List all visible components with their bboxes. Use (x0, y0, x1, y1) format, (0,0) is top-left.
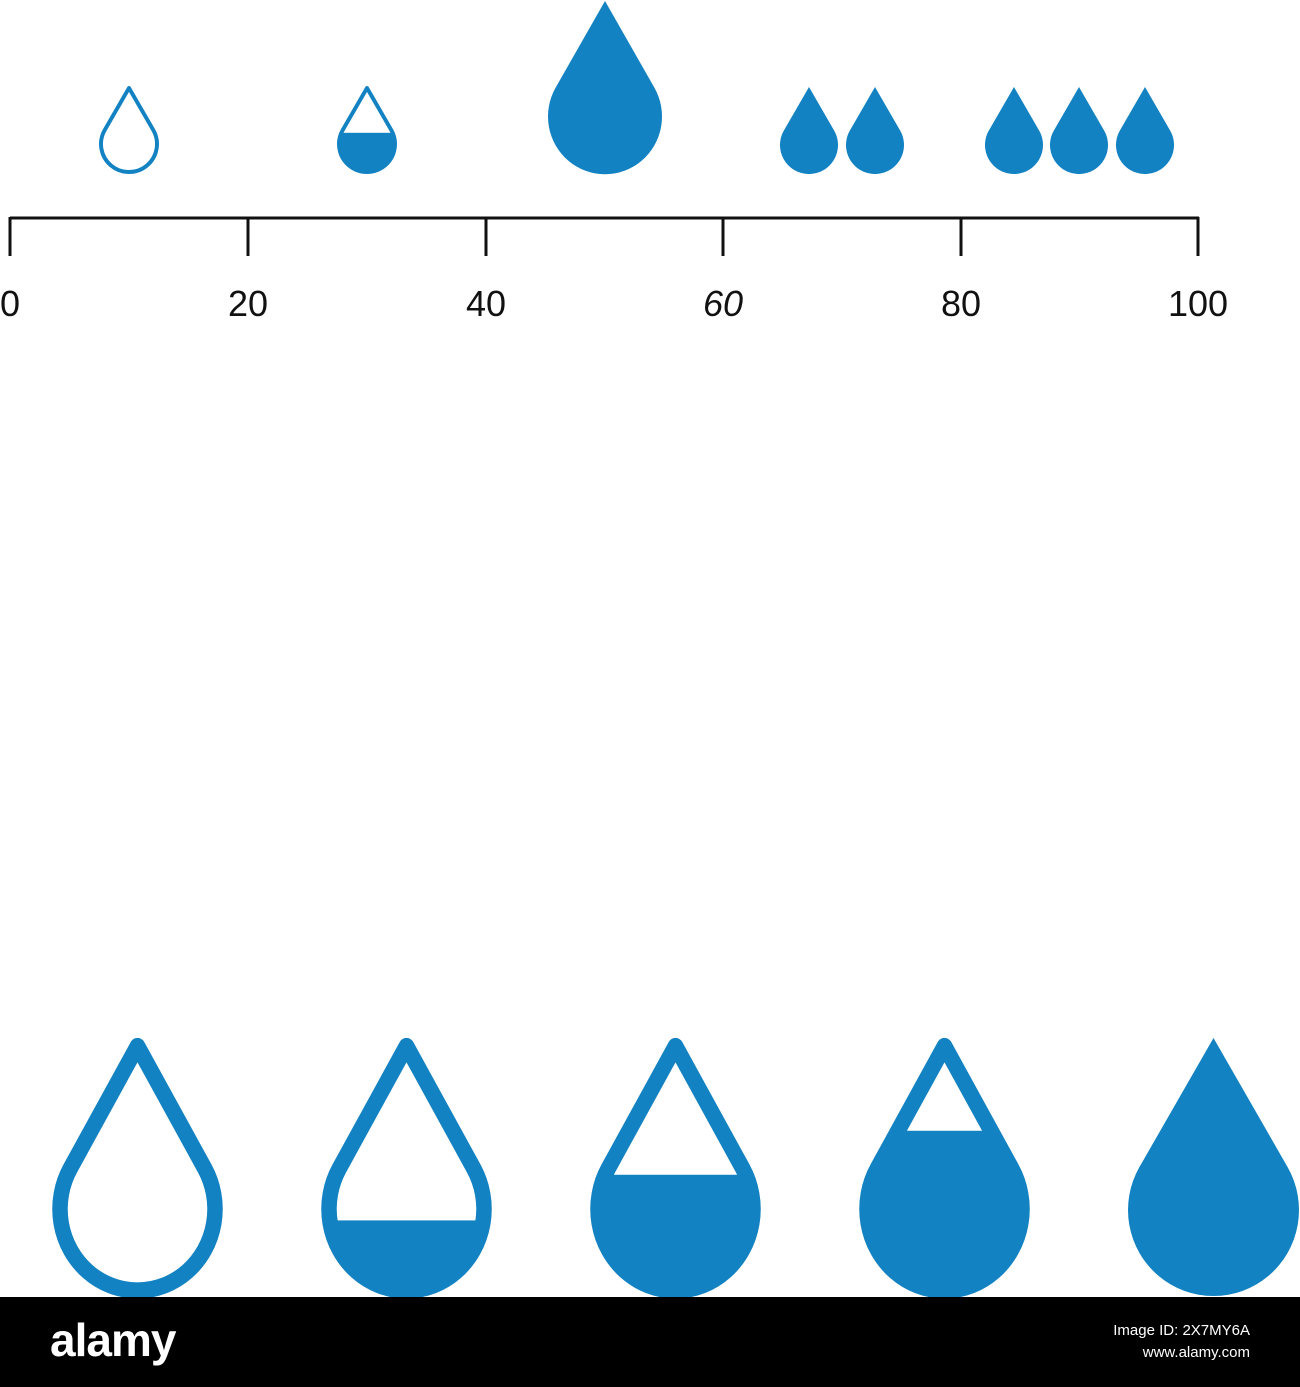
drop 75% (867, 1046, 1022, 1310)
drop 25% (329, 1046, 484, 1318)
footer bar: alamy (50, 1314, 177, 1366)
drop: partially filled (339, 88, 395, 178)
drop 50% (598, 1046, 753, 1305)
footer bar (0, 1297, 1300, 1387)
drop 100% (1128, 1038, 1299, 1296)
top drops row (101, 1, 1174, 178)
drop: large full (548, 1, 662, 174)
footer bar: Image ID: 2X7MY6A (1113, 1322, 1250, 1339)
axis (10, 217, 1199, 256)
bottom drops row (60, 1038, 1299, 1318)
footer bar: www.alamy.com (1142, 1344, 1250, 1361)
axis labels: 0 (0, 283, 20, 324)
drop 0% (60, 1046, 215, 1291)
drops: three (985, 87, 1174, 174)
axis labels: 40 (466, 283, 506, 324)
axis labels: 80 (941, 283, 981, 324)
drops: two (780, 87, 904, 174)
axis labels: 100 (1168, 283, 1228, 324)
drop: empty (101, 88, 157, 172)
axis labels: 60 (703, 283, 743, 324)
axis labels: 20 (228, 283, 268, 324)
axis labels (0, 283, 1228, 324)
